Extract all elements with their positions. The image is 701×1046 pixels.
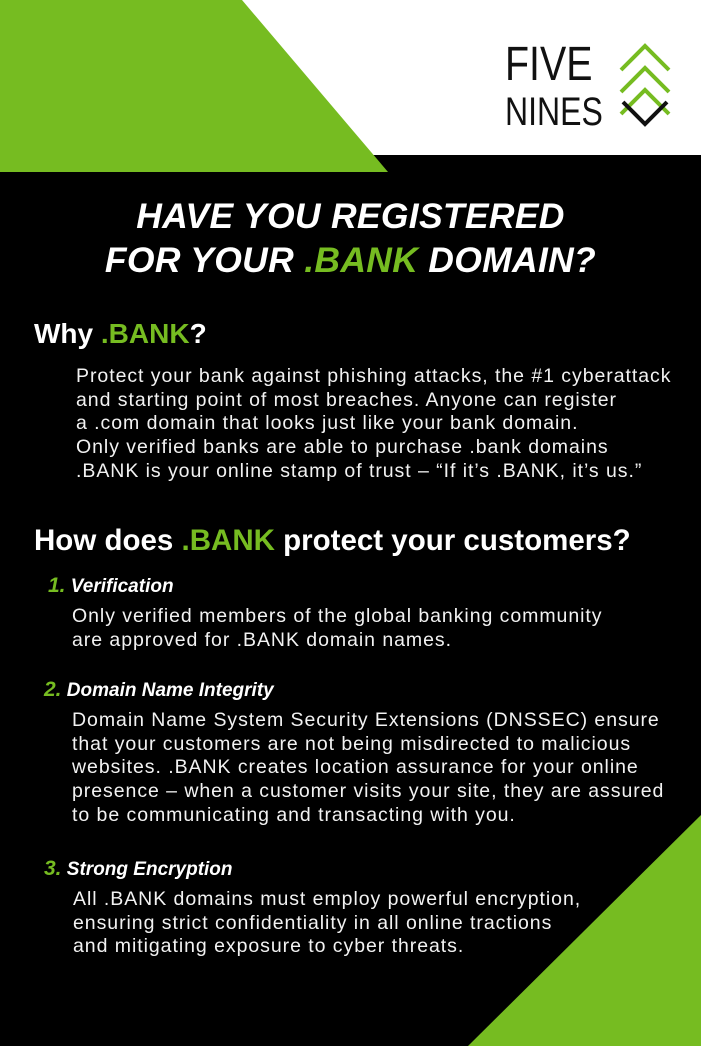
- item 2: presence – when a customer visits your site, they are assured: [72, 780, 664, 802]
- text: why bank: a .com domain that looks just like your bank domain.: [76, 412, 578, 434]
- item 2: that your customers are not being misdirected to malicious: [72, 733, 631, 755]
- text: why bank: and starting point of most breaches. Anyone can register: [76, 389, 617, 411]
- item 3: and mitigating exposure to cyber threats.: [73, 935, 464, 957]
- item 2: [44, 678, 664, 826]
- item 3: [44, 857, 581, 957]
- item 2: to be communicating and transacting with you.: [72, 804, 516, 826]
- text: why bank: Protect your bank against phishing attacks, the #1 cyberattack: [76, 365, 671, 387]
- item 2: Domain Name System Security Extensions (DNSSEC) ensure: [72, 709, 660, 731]
- text: why bank: [76, 365, 671, 482]
- title: [105, 196, 596, 280]
- title: FOR YOUR .BANK DOMAIN?: [105, 240, 596, 280]
- text: why bank: Only verified banks are able to purchase .bank domains: [76, 436, 609, 458]
- item 3: ensuring strict confidentiality in all online tractions: [73, 912, 552, 934]
- item 3: 3. Strong Encryption: [44, 857, 233, 880]
- logo: NINES: [505, 90, 603, 134]
- heading: why bank: Why .BANK?: [34, 318, 207, 349]
- item 2: 2. Domain Name Integrity: [44, 678, 274, 701]
- item 3: All .BANK domains must employ powerful encryption,: [73, 888, 581, 910]
- logo: FIVE: [505, 38, 592, 91]
- item 1: Only verified members of the global banking community: [72, 605, 602, 627]
- item 1: 1. Verification: [48, 574, 174, 597]
- item 1: are approved for .BANK domain names.: [72, 629, 452, 651]
- title: HAVE YOU REGISTERED: [136, 196, 565, 236]
- heading: how: How does .BANK protect your customers?: [34, 524, 631, 557]
- item 1: [48, 574, 602, 651]
- item 2: websites. .BANK creates location assurance for your online: [72, 756, 639, 778]
- logo: [505, 38, 670, 134]
- text: why bank: .BANK is your online stamp of trust – “If it’s .BANK, it’s us.”: [76, 460, 642, 482]
